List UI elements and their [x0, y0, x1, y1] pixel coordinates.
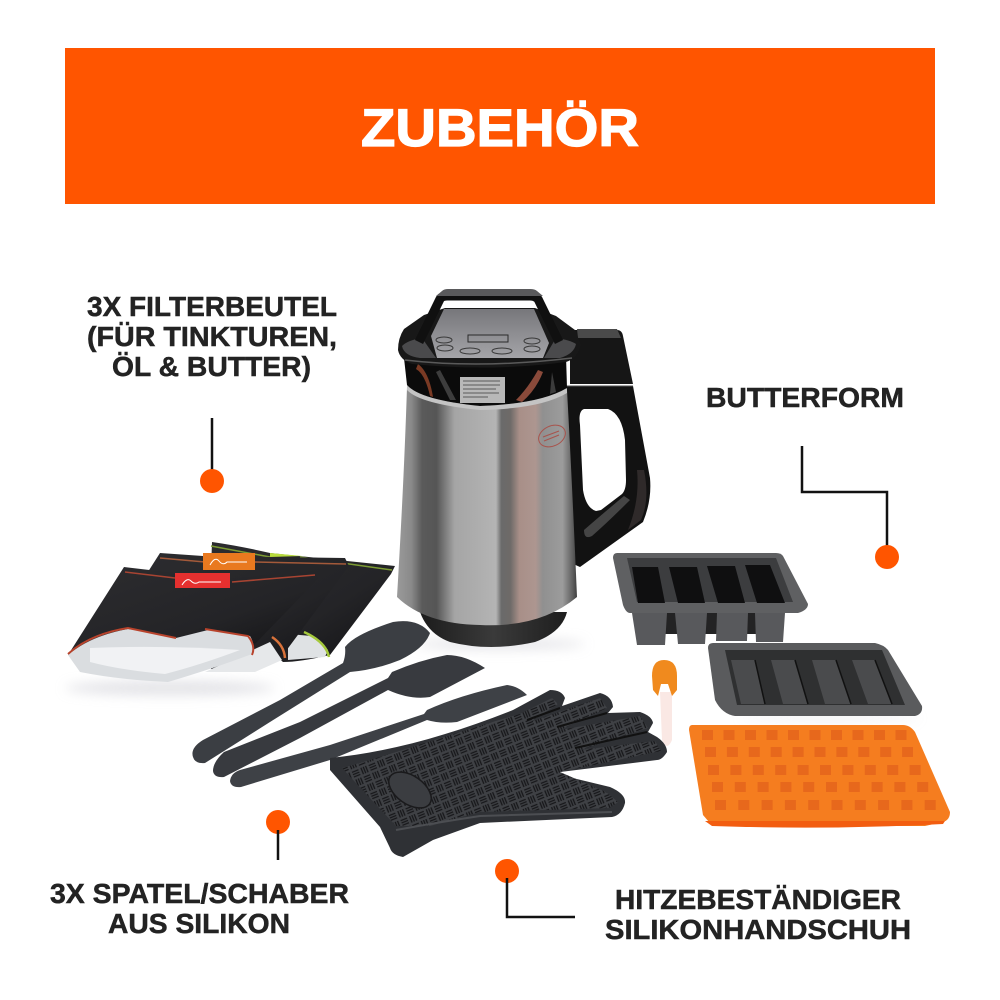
- callout: butter mold: BUTTERFORM: [706, 382, 904, 413]
- warning sticker: [460, 377, 505, 403]
- kettle handle: [566, 329, 650, 567]
- spatula 3: [230, 685, 527, 787]
- callout: spatulas: AUS SILIKON: [108, 908, 290, 939]
- silicone glove: [330, 690, 667, 857]
- callout: spatulas: [50, 810, 349, 939]
- kettle base: [420, 612, 567, 647]
- dropper: [652, 660, 677, 746]
- bag 3: green trim: [210, 542, 395, 662]
- filter bags: [68, 542, 395, 682]
- callout: glove: HITZEBESTÄNDIGER: [615, 884, 901, 915]
- bag 1: red trim: [68, 567, 319, 682]
- red stamp on body: [535, 421, 569, 451]
- callout: butter mold: [706, 382, 904, 569]
- stainless steel body: [397, 387, 577, 625]
- lid handle: [419, 296, 559, 342]
- black collar: [404, 356, 567, 406]
- bag 1 tag: [175, 573, 230, 588]
- callout: filter bags: ÖL & BUTTER): [112, 351, 311, 382]
- butter mold lid: [708, 643, 922, 716]
- callout: filter bags: (FÜR TINKTUREN,: [87, 321, 337, 352]
- glove grip oval: [382, 765, 438, 815]
- spatula 2: [213, 655, 485, 777]
- control panel: [431, 309, 549, 358]
- lid shoulders and rim: [398, 308, 581, 368]
- kettle / soup maker: [397, 289, 650, 647]
- callout: filter bags: [87, 291, 337, 493]
- gummy mold: [689, 725, 950, 828]
- callout: glove: SILIKONHANDSCHUH: [605, 914, 911, 945]
- bag 2 tag: [203, 553, 255, 570]
- callout: filter bags: 3X FILTERBEUTEL: [87, 291, 337, 322]
- spatula 1: [192, 621, 430, 763]
- shadows under products: [65, 639, 920, 720]
- bag 2: orange trim: [130, 553, 349, 672]
- callout: spatulas: 3X SPATEL/SCHABER: [50, 878, 349, 909]
- butter mold with legs: [613, 553, 808, 645]
- callout: glove: [495, 859, 911, 945]
- header banner: [65, 48, 935, 204]
- title: ZUBEHÖR: [361, 99, 639, 158]
